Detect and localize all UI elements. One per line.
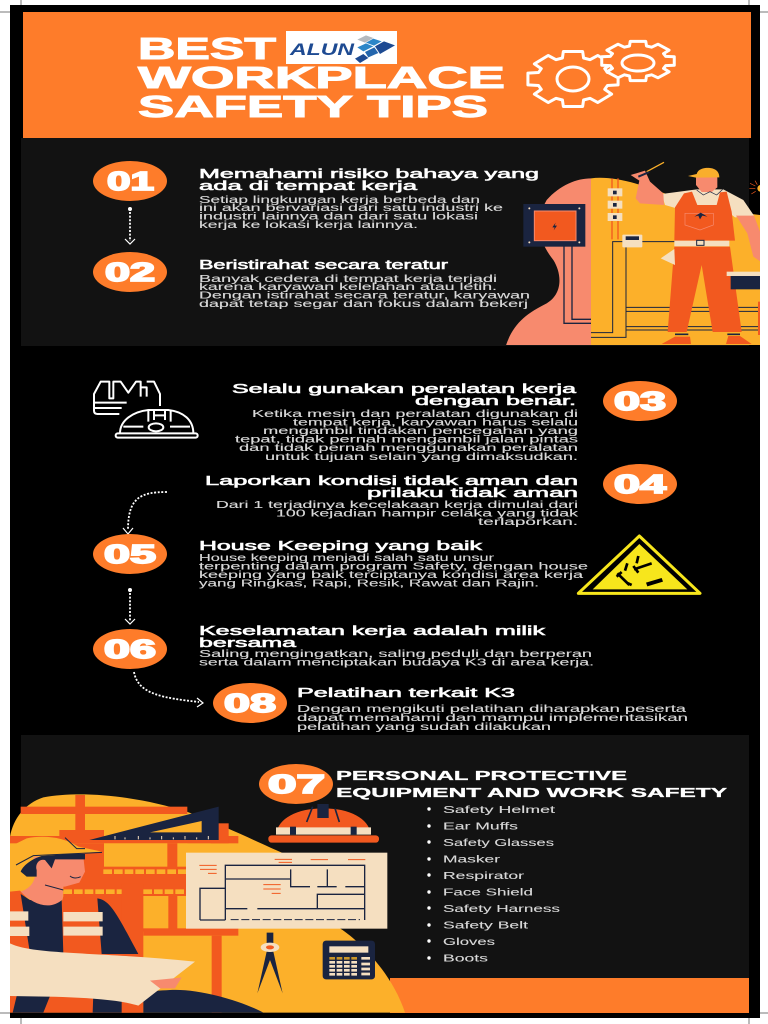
body 03: Ketika mesin dan peralatan digunakan di <box>252 409 578 420</box>
body 01: ini akan bervariasi dari satu industri ke <box>199 203 504 214</box>
body 05: House keeping menjadi salah satu unsur <box>199 553 495 564</box>
yellow blob <box>10 794 405 1013</box>
body 08: dapat memahami dan mampu implementasikan <box>297 713 688 724</box>
step 08 <box>213 683 688 733</box>
orange footer strip <box>390 978 749 1013</box>
body 06: serta dalam menciptakan budaya K3 di area kerja. <box>199 658 594 668</box>
list: protective equipment: Ear Muffs <box>443 822 518 832</box>
panel: construction illustration <box>10 794 749 1013</box>
scaffold <box>10 795 238 1013</box>
body 02 <box>199 274 530 310</box>
heading 07: PERSONAL PROTECTIVE <box>336 769 627 783</box>
arrow 04 to 05 <box>123 492 167 534</box>
logo: ALUN <box>286 31 397 64</box>
body 01: kerja ke lokasi kerja lainnya. <box>199 220 418 231</box>
electric panel <box>523 204 585 247</box>
worker neck <box>21 877 63 905</box>
icon: gears <box>528 41 674 106</box>
heading 03: Selalu gunakan peralatan kerja <box>232 381 578 396</box>
heading 01: Memahami risiko bahaya yang <box>199 166 539 181</box>
body 04: terlaporkan. <box>478 517 578 528</box>
list: protective equipment: Face Shield <box>443 888 533 898</box>
body 08: pelatihan yang sudah dilakukan <box>297 722 551 733</box>
heading 05: House Keeping yang baik <box>199 538 483 553</box>
list: protective equipment: Safety Belt <box>443 920 528 932</box>
heading 01: ada di tempat kerja <box>199 178 419 193</box>
body 03: tepat, tidak pernah mengambil jalan pintas <box>235 434 578 446</box>
badge 05 <box>93 534 167 574</box>
list: protective equipment: Safety Glasses <box>443 838 554 849</box>
body 05 <box>199 553 589 590</box>
compass <box>257 933 283 993</box>
meter <box>622 235 642 247</box>
body 02: dapat tetap segar dan fokus dalam bekerj <box>199 299 528 310</box>
heading 02: Beristirahat secara teratur <box>199 257 449 272</box>
body 05: yang Ringkas, Rapi, Resik, Rawat dan Rajin. <box>199 578 539 590</box>
plan roll <box>10 943 195 1006</box>
step 02 <box>93 252 530 310</box>
list: protective equipment: Boots <box>443 954 488 964</box>
worker face <box>33 857 85 887</box>
arrow 01 to 02 <box>125 207 135 244</box>
body 04: 100 kejadian hampir celaka yang tidak <box>276 508 580 520</box>
list: protective equipment: Safety Harness <box>443 904 560 915</box>
body 01 <box>199 195 504 231</box>
body 06: Saling mengingatkan, saling peduli dan berperan <box>199 649 592 660</box>
badge 01: 01 <box>107 166 154 196</box>
list: protective equipment: Respirator <box>443 871 525 882</box>
body 08: Dengan mengikuti pelatihan diharapkan peserta <box>297 704 687 715</box>
badge 01 <box>93 161 167 201</box>
body 05: terpenting dalam program Safety, dengan house <box>199 562 589 572</box>
logo: ALUN: ALUN <box>289 40 355 59</box>
body 08 <box>297 704 688 733</box>
body 02: Banyak cedera di tempat kerja terjadi <box>199 274 497 285</box>
step 03 <box>232 381 677 463</box>
heading 06: Keselamatan kerja adalah milik <box>199 623 546 638</box>
body 06 <box>199 649 594 668</box>
list: protective equipment: Safety Helmet <box>443 805 555 816</box>
list: protective equipment: Masker <box>443 854 501 866</box>
heading 07: EQUIPMENT AND WORK SAFETY <box>336 786 728 800</box>
body 03: mengambil tindakan pencegahan yang <box>263 426 578 437</box>
heading 07 <box>336 769 728 800</box>
badge 02: 02 <box>105 257 155 287</box>
badge 03 <box>603 381 677 421</box>
heading 06 <box>199 623 546 650</box>
worker helmet <box>16 836 102 857</box>
badge 06 <box>93 629 167 669</box>
list: protective equipment <box>427 805 560 964</box>
step 06 <box>93 623 594 669</box>
list: protective equipment: Gloves <box>443 937 495 948</box>
badge 08 <box>213 683 287 723</box>
title: SAFETY TIPS <box>138 89 488 124</box>
heading 03: dengan benar. <box>415 393 576 408</box>
body 03: dan tidak pernah menggunakan peralatan <box>239 443 578 454</box>
badge 07: 07 <box>268 769 325 799</box>
worker vest <box>10 891 140 1013</box>
body 04: Dari 1 terjadinya kecelakaan kerja dimulai dari <box>216 500 578 511</box>
badge 08: 08 <box>224 688 276 718</box>
icon: vest and helmet <box>94 382 198 438</box>
title <box>138 31 505 124</box>
salmon blob <box>506 178 591 345</box>
badge 07 <box>259 764 333 804</box>
heading 08: Pelatihan terkait K3 <box>297 685 515 700</box>
body 01: Setiap lingkungan kerja berbeda dan <box>199 195 480 206</box>
badge 05: 05 <box>104 539 156 569</box>
body 05: keeping yang baik terciptanya kondisi area kerja <box>199 570 584 581</box>
title: BEST <box>138 31 276 66</box>
panel: electrician illustration <box>506 162 764 345</box>
body 01: industri lainnya dan dari satu lokasi <box>199 212 478 222</box>
heading 01 <box>199 166 539 193</box>
body 04 <box>216 500 580 528</box>
worker <box>662 189 754 217</box>
badge 02 <box>93 252 167 292</box>
heading 04: prilaku tidak aman <box>367 485 578 500</box>
yellow wall <box>591 178 760 345</box>
body 02: Dengan istirahat secara teratur, karyawan <box>199 290 530 302</box>
heading 06: bersama <box>199 635 298 650</box>
icon: warning triangle <box>578 536 700 593</box>
badge 06: 06 <box>104 634 156 664</box>
step 05 <box>93 534 589 590</box>
set square <box>89 807 219 840</box>
badge 04: 04 <box>614 469 667 499</box>
badge 03: 03 <box>614 386 666 416</box>
body 03: tempat kerja, karyawan harus selalu <box>293 418 578 428</box>
worker hair <box>21 854 85 877</box>
panel: title banner <box>23 12 751 138</box>
step 04 <box>205 464 677 528</box>
heading 04 <box>205 473 578 500</box>
body 03: untuk tujuan selain yang dimaksudkan. <box>265 452 578 463</box>
hard hat <box>278 808 369 828</box>
body 02: karena karyawan kelelahan atau letih. <box>199 282 497 293</box>
body 03 <box>235 409 578 463</box>
blueprint <box>186 853 387 929</box>
arrow 05 to 06 <box>125 588 135 624</box>
spark <box>749 180 760 194</box>
step 01 <box>93 161 539 231</box>
heading 04: Laporkan kondisi tidak aman dan <box>205 473 578 488</box>
heading 03 <box>232 381 578 408</box>
arrow 06 to 08 <box>134 672 203 707</box>
switches <box>608 188 622 196</box>
title: WORKPLACE <box>138 60 505 95</box>
calculator <box>323 941 375 979</box>
badge 04 <box>603 464 677 504</box>
